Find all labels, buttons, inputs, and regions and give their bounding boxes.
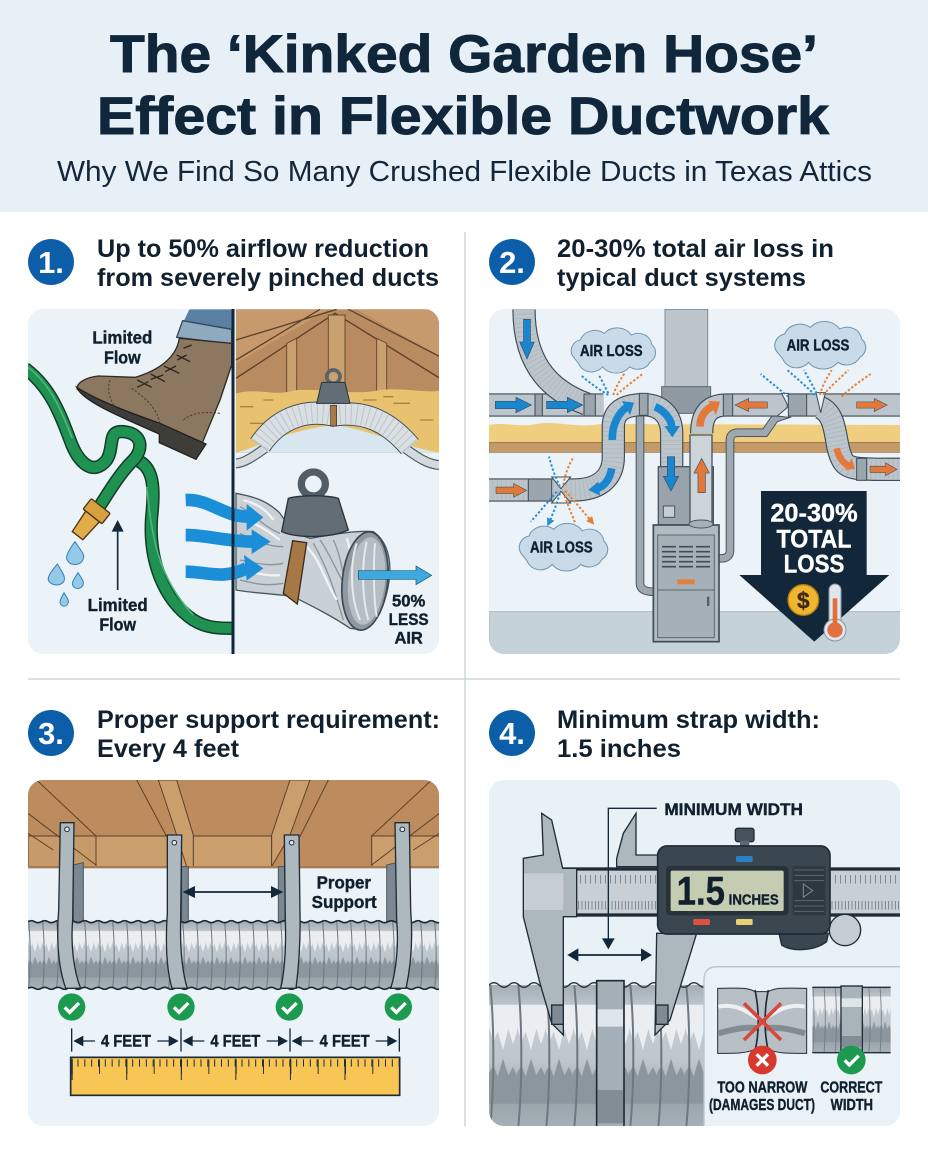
- minimum width label and leader: [602, 800, 803, 949]
- 4 feet dimension lines: 4 FEET: [210, 1032, 260, 1051]
- too narrow label: (DAMAGES DUCT): [709, 1097, 815, 1114]
- section 3 heading: Every 4 feet: [97, 735, 240, 763]
- correct width label: WIDTH: [831, 1097, 873, 1114]
- blue airflow arrows: [495, 319, 680, 496]
- section 1 heading: 1.: [38, 245, 64, 280]
- attic scene: [236, 309, 440, 465]
- main plenum: [662, 309, 711, 413]
- yellow ruler: [71, 1057, 400, 1095]
- large duct and strap: [489, 981, 709, 1127]
- section 4 heading: 1.5 inches: [557, 735, 681, 763]
- label: limited flow top: [93, 330, 152, 364]
- large crushed duct with weight: [236, 472, 393, 632]
- metal hanger straps: [58, 823, 412, 988]
- digital readout: [658, 846, 830, 934]
- total loss down arrow: [739, 491, 889, 642]
- too narrow label: TOO NARROW: [717, 1080, 808, 1097]
- spacing arrow: [183, 886, 283, 898]
- label: 50% less air: LESS: [389, 610, 429, 629]
- section 3 heading: 3.: [38, 716, 64, 751]
- section 2 heading: 20-30% total air loss in: [557, 235, 834, 263]
- too narrow strap example: [718, 988, 807, 1053]
- brass nozzle: [68, 499, 110, 543]
- condensate pipes: [640, 413, 790, 592]
- air loss cloud right: AIR LOSS: [787, 338, 849, 355]
- dollar coin: $: [797, 587, 810, 613]
- panel 3: strap supports every 4 feet: [28, 780, 441, 1126]
- rear strap pieces: [73, 863, 397, 922]
- too narrow badge: [748, 1046, 777, 1074]
- insulation and joist: [489, 423, 901, 452]
- label: 50% less air: [389, 594, 428, 644]
- label: limited flow top: Limited: [92, 328, 152, 348]
- three blue airflow arrows: [186, 500, 271, 581]
- title: Effect in Flexible Ductwork: [97, 87, 830, 146]
- label: 50% less air: 50%: [392, 592, 426, 611]
- air loss clouds: [571, 328, 656, 373]
- 4 feet dimension lines: [72, 1028, 399, 1052]
- panel 2: duct system air loss: [488, 309, 902, 655]
- title: [97, 25, 830, 146]
- outflow arrow: [358, 566, 432, 585]
- ceiling joists: [28, 780, 440, 868]
- correct strap example: [812, 986, 891, 1054]
- section 4 heading: [489, 706, 820, 763]
- green check badges: [58, 993, 412, 1021]
- thumb wheels: [735, 828, 861, 950]
- title: The ‘Kinked Garden Hose’: [110, 25, 818, 84]
- correct width label: CORRECT: [820, 1080, 883, 1097]
- section 4 heading: Minimum strap width:: [557, 706, 820, 734]
- section 1 heading: [28, 235, 439, 292]
- orange airflow arrows: [496, 398, 897, 497]
- 4 feet dimension lines: 4 FEET: [320, 1032, 370, 1051]
- proper support label: Proper: [317, 873, 371, 893]
- label: limited flow top: Flow: [104, 347, 142, 367]
- caliper jaws: [523, 813, 697, 1035]
- too narrow label: [709, 1080, 815, 1114]
- section 2 heading: typical duct systems: [557, 264, 806, 292]
- total loss down arrow: 20-30%: [770, 500, 858, 528]
- floor: [489, 612, 901, 655]
- air loss cloud right: [775, 321, 866, 369]
- digital readout: 1.5: [677, 869, 725, 913]
- section 3 heading: Proper support requirement:: [97, 706, 440, 734]
- up arrow: [112, 520, 124, 590]
- minimum width label and leader: MINIMUM WIDTH: [664, 800, 803, 819]
- section 3 heading: [28, 706, 440, 763]
- subtitle: Why We Find So Many Crushed Flexible Ducts in Texas Attics: [57, 156, 872, 188]
- dotted leak arrows: [531, 370, 871, 523]
- green garden hose: [25, 367, 233, 628]
- section 1 heading: from severely pinched ducts: [97, 264, 439, 292]
- 4 feet dimension lines: 4 FEET: [101, 1032, 151, 1051]
- thermometer: [824, 584, 846, 641]
- small pinched duct with weight: [260, 370, 410, 447]
- total loss down arrow: TOTAL: [776, 525, 851, 553]
- dollar coin: [788, 585, 819, 615]
- return column: [689, 393, 788, 528]
- total loss down arrow: LOSS: [784, 551, 844, 579]
- flexible duct: [28, 921, 441, 989]
- air loss clouds: AIR LOSS: [580, 343, 643, 360]
- panel 4: minimum strap width caliper: [489, 780, 902, 1127]
- label: limited flow bottom: Limited: [88, 595, 148, 615]
- air loss cloud lower left: [519, 523, 608, 571]
- width arrow: [567, 948, 652, 962]
- correct width label: [820, 1080, 883, 1114]
- label: limited flow bottom: Flow: [99, 615, 137, 635]
- flexible ducts: [488, 309, 902, 503]
- section 1 heading: Up to 50% airflow reduction: [97, 235, 429, 263]
- label: 50% less air: AIR: [394, 628, 423, 647]
- trouser leg and boot: [77, 309, 232, 459]
- header band: [0, 0, 928, 212]
- proper support label: Support: [312, 892, 377, 912]
- correct badge: [837, 1046, 866, 1074]
- water drops: [48, 542, 84, 606]
- proper support label: [312, 873, 377, 912]
- label: limited flow bottom: [88, 598, 147, 631]
- section 2 heading: [489, 235, 834, 292]
- caliper beam: [563, 867, 902, 917]
- section 2 heading: 2.: [499, 245, 525, 280]
- section 4 heading: 4.: [499, 716, 525, 751]
- panel 1: kinked hose and pinched duct: [25, 309, 440, 654]
- air loss cloud lower left: AIR LOSS: [530, 539, 593, 556]
- comparison inset: [704, 967, 902, 1127]
- furnace: [653, 467, 719, 642]
- digital readout: INCHES: [729, 892, 779, 908]
